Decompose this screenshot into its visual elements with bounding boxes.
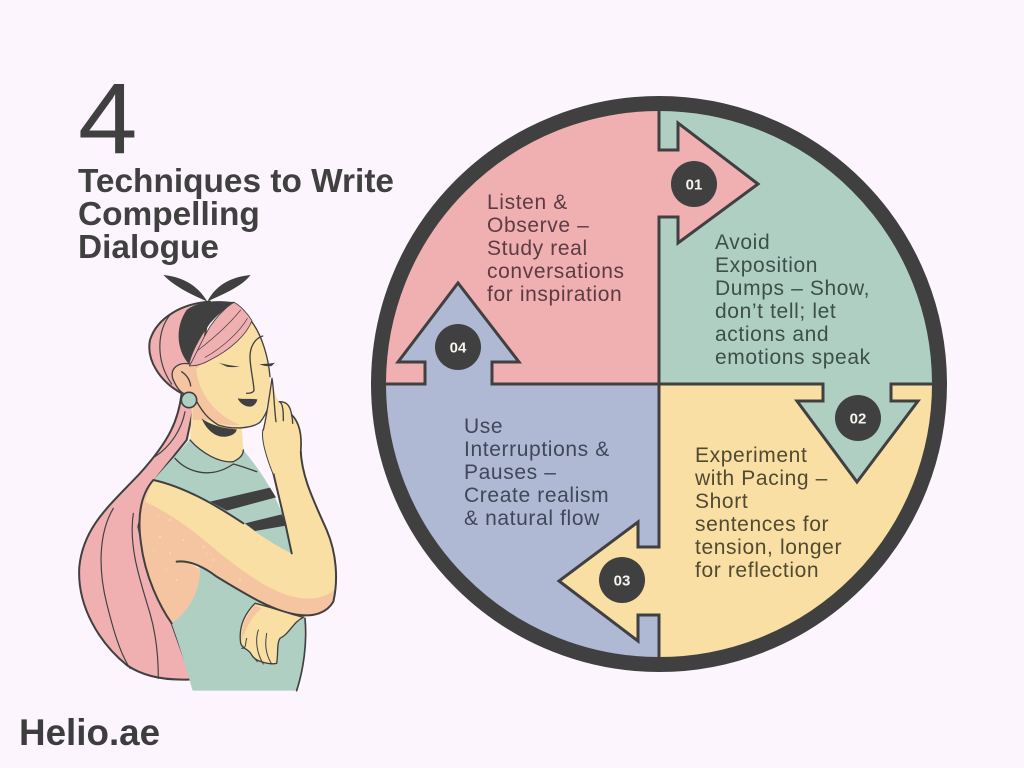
badge 02: 02 (850, 410, 866, 428)
text: technique 2: Dumps – Show, (715, 277, 870, 300)
panel: 04 quadrant blue (379, 384, 659, 664)
illustration: thinking woman (79, 275, 336, 691)
neck (190, 393, 243, 462)
arm highlight (145, 378, 336, 598)
long hair (79, 302, 210, 680)
face (195, 322, 270, 427)
brand: Helio.ae (19, 712, 160, 753)
text: technique 3: sentences for (695, 513, 829, 536)
panel: 01 quadrant pink (379, 104, 659, 384)
text: technique 4: Pauses – (464, 461, 557, 484)
text: technique 3: Short (695, 490, 748, 513)
badge 04: 04 (450, 340, 467, 356)
text: technique 3: tension, longer (695, 536, 842, 559)
badge 04 (435, 324, 481, 370)
dress right edge (297, 618, 306, 691)
text: technique 1: conversations (487, 260, 625, 283)
ear and neck shadow (172, 364, 240, 425)
badge 01: 01 (686, 176, 702, 194)
hand shadow (242, 605, 262, 640)
text: technique 3: with Pacing – (694, 467, 828, 490)
text: technique 2: emotions speak (715, 346, 871, 369)
arrow 03 (559, 384, 659, 664)
arrow 02 (659, 384, 939, 482)
text: technique 3: for reflection (695, 559, 819, 582)
arrow 04 (379, 283, 659, 384)
circular diagram (378, 104, 940, 664)
arm and shoulder base (139, 378, 336, 623)
hair strands (101, 315, 185, 678)
badge 03: 03 (614, 572, 630, 590)
dress (153, 439, 306, 691)
text: technique 1: Listen & (487, 191, 568, 214)
jaw shadow (202, 418, 237, 437)
text: technique 4: Create realism (464, 484, 609, 507)
face outline (172, 322, 270, 428)
title text: Techniques to Write (78, 163, 394, 200)
arrow 01 (659, 104, 758, 384)
panel: 03 quadrant yellow (659, 384, 939, 664)
panel: 02 quadrant green (659, 104, 939, 384)
text: technique 4: Use (464, 415, 503, 438)
title text: Compelling (78, 196, 260, 233)
ear line (182, 372, 191, 386)
badge 01 (671, 161, 717, 207)
text: technique 4: & natural flow (464, 507, 600, 530)
bow (163, 275, 251, 302)
text: technique 1: Study real (487, 237, 588, 260)
big number 4: 4 (78, 62, 138, 174)
headband (179, 301, 235, 365)
text: technique 4: Interruptions & (464, 438, 610, 461)
badge 02 (835, 395, 881, 441)
text: technique 3: Experiment (695, 444, 807, 467)
skin freckles (153, 516, 304, 611)
text: technique 2: Avoid (715, 231, 770, 254)
arm outline (139, 415, 336, 623)
front hair (189, 302, 252, 366)
text: technique 2: don’t tell; let (715, 300, 836, 323)
hair front strands (198, 310, 247, 357)
text: technique 2: actions and (715, 323, 829, 346)
collar lines (175, 440, 257, 473)
finger lines (242, 630, 272, 664)
outer ring (378, 104, 940, 664)
title (78, 62, 394, 266)
text: technique 2: Exposition (715, 254, 818, 277)
facial features (218, 336, 275, 407)
lower hand (240, 603, 303, 664)
text: technique 1: Observe – (487, 214, 589, 237)
text: technique 1: for inspiration (487, 283, 622, 306)
badge 03 (599, 557, 645, 603)
title text: Dialogue (78, 229, 219, 266)
dress stripes (210, 488, 286, 531)
raised hand (263, 378, 301, 473)
earring (181, 392, 197, 408)
